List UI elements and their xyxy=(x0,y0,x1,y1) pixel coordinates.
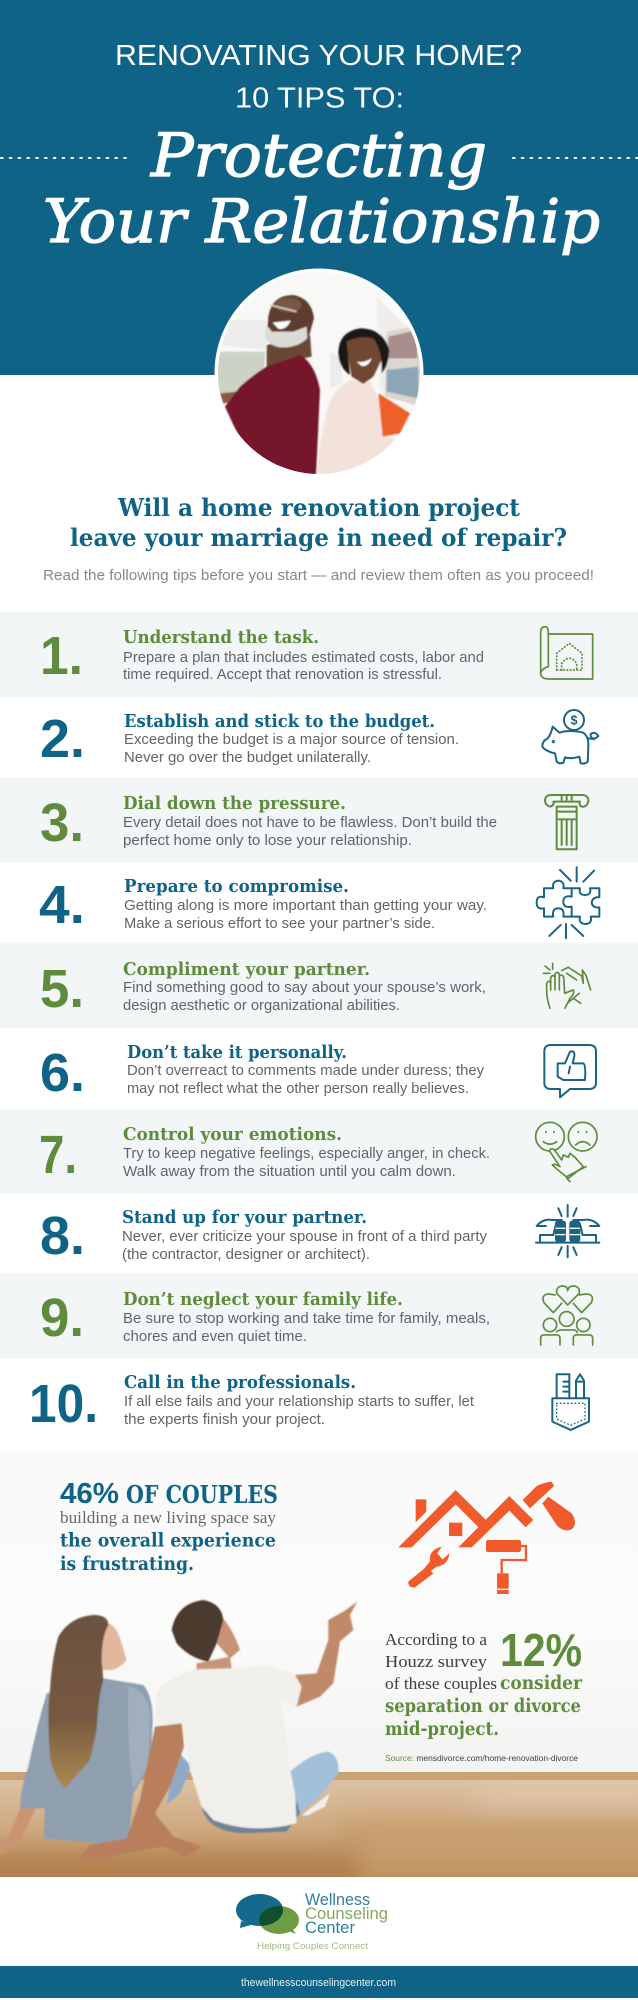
icon: fist bump xyxy=(536,1205,599,1257)
tip 10: Call in the professionals. xyxy=(124,1372,356,1393)
icon: piggy bank: $ xyxy=(570,713,578,727)
icon: thumbs up bubble xyxy=(544,1045,596,1097)
tip 4: 4. xyxy=(39,875,85,935)
icon: house and tools xyxy=(398,1482,575,1594)
footer bar xyxy=(0,1966,638,1998)
icon: family hearts xyxy=(541,1286,593,1345)
tip 8: Never, ever criticize your spouse in front of a third party xyxy=(122,1229,488,1245)
tip 5: 5. xyxy=(40,959,84,1019)
tip 4 xyxy=(0,862,638,943)
tip 8 xyxy=(0,1194,638,1273)
tip 1 xyxy=(0,612,638,697)
tip 10: 10. xyxy=(29,1374,98,1434)
tip 7 xyxy=(0,1109,638,1194)
header banner xyxy=(0,0,638,375)
tip 6: 6. xyxy=(40,1043,85,1103)
intro heading: Will a home renovation project xyxy=(117,493,520,522)
logo: Center xyxy=(305,1918,355,1937)
stat: 46 percent: 46% xyxy=(60,1478,119,1510)
intro heading xyxy=(70,493,567,552)
title: Your Relationship xyxy=(43,187,600,257)
tip 9 xyxy=(0,1273,638,1358)
tip 3: perfect home only to lose your relationship. xyxy=(123,833,412,849)
tip 6: Don’t overreact to comments made under duress; they xyxy=(127,1063,485,1079)
tip 2: Establish and stick to the budget. xyxy=(124,711,435,732)
tip 10: the experts finish your project. xyxy=(124,1412,325,1428)
tip 7: Control your emotions. xyxy=(123,1124,342,1145)
stat: 46 percent: the overall experience xyxy=(60,1530,276,1552)
photo panel: couple on floor xyxy=(0,1598,638,1877)
icon: puzzle xyxy=(537,867,599,938)
tip 6: Don’t take it personally. xyxy=(127,1042,347,1063)
stat: 46 percent xyxy=(60,1478,278,1575)
logo: Wellness xyxy=(305,1890,370,1909)
logo xyxy=(236,1893,387,1951)
stat: 12 percent: mid-project. xyxy=(385,1718,499,1740)
tip 8: Stand up for your partner. xyxy=(122,1207,367,1228)
tip 10: If all else fails and your relationship starts to suffer, let xyxy=(124,1394,474,1410)
stat: 12 percent: According to a xyxy=(385,1630,487,1649)
icon: pocket tools xyxy=(552,1374,589,1430)
tip 3 xyxy=(0,778,638,862)
title xyxy=(1,40,638,257)
stat: 12 percent: of these couples xyxy=(385,1674,497,1693)
tip 7: 7. xyxy=(39,1125,77,1185)
stat: 12 percent: Houzz survey xyxy=(385,1652,488,1671)
icon: high five xyxy=(543,963,591,1008)
icon: blueprint xyxy=(541,627,593,679)
couple photo in circle xyxy=(214,268,424,474)
tip 3: 3. xyxy=(40,793,84,853)
intro heading: leave your marriage in need of repair? xyxy=(70,523,567,552)
tip 2: Never go over the budget unilaterally. xyxy=(124,750,371,766)
tip 4: Prepare to compromise. xyxy=(124,876,349,897)
tip 7: Try to keep negative feelings, especially anger, in check. xyxy=(123,1146,490,1162)
tip 2: Exceeding the budget is a major source of tension. xyxy=(124,732,459,748)
tip 1: time required. Accept that renovation is stressful. xyxy=(123,667,442,683)
title: RENOVATING YOUR HOME? xyxy=(115,40,522,72)
tip 1: Understand the task. xyxy=(123,627,319,648)
logo: Counseling xyxy=(305,1904,388,1923)
icon: column xyxy=(545,795,588,849)
tip 4: Getting along is more important than getting your way. xyxy=(124,898,487,914)
man xyxy=(80,1600,357,1859)
stat: 12 percent xyxy=(385,1624,583,1740)
logo: Helping Couples Connect xyxy=(257,1941,368,1952)
icon: emotions xyxy=(536,1122,597,1182)
stat: 46 percent: is frustrating. xyxy=(60,1553,194,1575)
tip 1: Prepare a plan that includes estimated costs, labor and xyxy=(123,650,484,666)
tip 8: (the contractor, designer or architect). xyxy=(122,1247,370,1263)
intro text: Read the following tips before you start — and review them often as you proceed! xyxy=(43,567,594,584)
tip 7: Walk away from the situation until you calm down. xyxy=(123,1164,456,1180)
tip 6 xyxy=(0,1028,638,1109)
tip 4: Make a serious effort to see your partner’s side. xyxy=(124,916,435,932)
tip 6: may not reflect what the other person really believes. xyxy=(127,1081,469,1097)
tip 5: Find something good to say about your spouse’s work, xyxy=(123,980,486,996)
tip 9: chores and even quiet time. xyxy=(123,1329,307,1345)
stat: 12 percent: separation or divorce xyxy=(385,1695,581,1717)
tip 5: Compliment your partner. xyxy=(123,959,370,980)
icon: piggy bank xyxy=(542,710,598,764)
tip 9: 9. xyxy=(40,1288,84,1348)
tip 2: 2. xyxy=(40,709,85,769)
tip 2 xyxy=(0,697,638,778)
stat: 46 percent: building a new living space say xyxy=(60,1508,277,1527)
tip 1: 1. xyxy=(40,626,83,686)
tip 9: Don’t neglect your family life. xyxy=(123,1289,403,1310)
tip 3: Every detail does not have to be flawless. Don’t build the xyxy=(123,815,497,831)
woman xyxy=(0,1615,153,1855)
stat: 12 percent: consider xyxy=(500,1672,583,1694)
source note: Source: mensdivorce.com/home-renovation-divorce xyxy=(385,1753,578,1763)
tip 8: 8. xyxy=(40,1206,85,1266)
tip 3: Dial down the pressure. xyxy=(123,793,346,814)
footer bar: thewellnesscounselingcenter.com xyxy=(241,1977,396,1989)
tip 10 xyxy=(0,1358,638,1451)
tip 5 xyxy=(0,943,638,1028)
stat: 46 percent: OF COUPLES xyxy=(126,1480,278,1509)
title: Protecting xyxy=(150,121,487,191)
stat: 12 percent: 12% xyxy=(500,1624,582,1676)
title: 10 TIPS TO: xyxy=(235,82,404,114)
tip 9: Be sure to stop working and take time for family, meals, xyxy=(123,1311,490,1327)
tip 5: design aesthetic or organizational abilities. xyxy=(123,998,400,1014)
